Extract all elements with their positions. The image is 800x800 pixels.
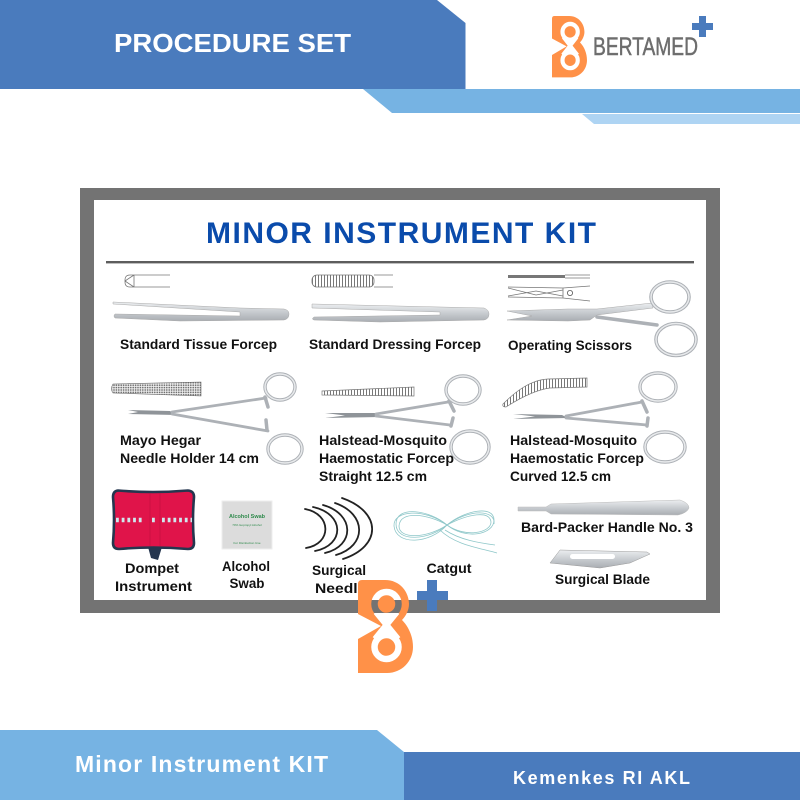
footer banner: registration: Kemenkes RI AKL <box>513 768 690 788</box>
item: halstead-mosquito curved forcep <box>503 373 685 484</box>
item: surgical needles: Surgical <box>312 562 366 578</box>
footer banner: product name: Minor Instrument KIT <box>75 751 328 777</box>
item: alcohol swab: Swab <box>230 575 264 591</box>
item: mayo hegar needle holder: Needle Holder 14 cm <box>120 450 259 466</box>
item: halstead-mosquito curved forcep: Halstead-Mosquito <box>510 432 637 448</box>
logo: Bertamed: BERTAMED <box>593 33 698 61</box>
item: alcohol swab: For Disinfection Use <box>233 541 261 545</box>
item: surgical blade <box>550 550 650 587</box>
item: mayo hegar needle holder <box>112 374 302 466</box>
panel: instrument kit poster <box>80 188 720 613</box>
footer banner: registration <box>404 752 800 800</box>
item: alcohol swab: Alcohol Swab <box>229 514 266 520</box>
item: mayo hegar needle holder: Mayo Hegar <box>120 432 202 448</box>
watermark logo <box>358 580 448 673</box>
item: standard dressing forcep: Standard Dressing Forcep <box>309 336 481 352</box>
item: halstead-mosquito curved forcep: Curved 12.5 cm <box>510 468 611 484</box>
item: dompet instrument pouch: Instrument <box>115 578 192 594</box>
title rule <box>106 261 694 263</box>
item: halstead-mosquito straight forcep <box>319 376 489 484</box>
item: operating scissors <box>507 275 696 356</box>
heading: procedure set: PROCEDURE SET <box>114 28 351 58</box>
item: bard-packer handle: Bard-Packer Handle No. 3 <box>521 519 693 535</box>
header banner <box>0 0 466 89</box>
item: halstead-mosquito straight forcep: Halstead-Mosquito <box>319 432 447 448</box>
item: bard-packer handle <box>518 500 693 535</box>
item: surgical needles: Needles <box>315 580 375 596</box>
poster title: MINOR INSTRUMENT KIT <box>206 217 596 250</box>
header accent stripes <box>363 89 800 124</box>
item: standard tissue forcep <box>113 275 289 352</box>
item: alcohol swab <box>222 501 272 591</box>
item: halstead-mosquito straight forcep: Straight 12.5 cm <box>319 468 427 484</box>
item: catgut: Catgut <box>426 560 472 576</box>
item: halstead-mosquito straight forcep: Haemostatic Forcep <box>319 450 454 466</box>
item: surgical blade: Surgical Blade <box>555 571 650 587</box>
item: operating scissors: Operating Scissors <box>508 337 632 353</box>
item: dompet instrument pouch <box>113 490 194 594</box>
item: catgut <box>394 511 497 576</box>
item: alcohol swab: Alcohol <box>222 558 270 574</box>
item: standard tissue forcep: Standard Tissue Forcep <box>120 336 277 352</box>
logo: Bertamed <box>552 16 713 77</box>
item: standard dressing forcep <box>309 275 489 352</box>
item: alcohol swab: 70% Isopropyl Alcohol <box>232 523 262 527</box>
footer banner: product name <box>0 730 404 800</box>
item: surgical needles <box>305 498 375 596</box>
item: dompet instrument pouch: Dompet <box>125 560 179 576</box>
item: halstead-mosquito curved forcep: Haemostatic Forcep <box>510 450 644 466</box>
